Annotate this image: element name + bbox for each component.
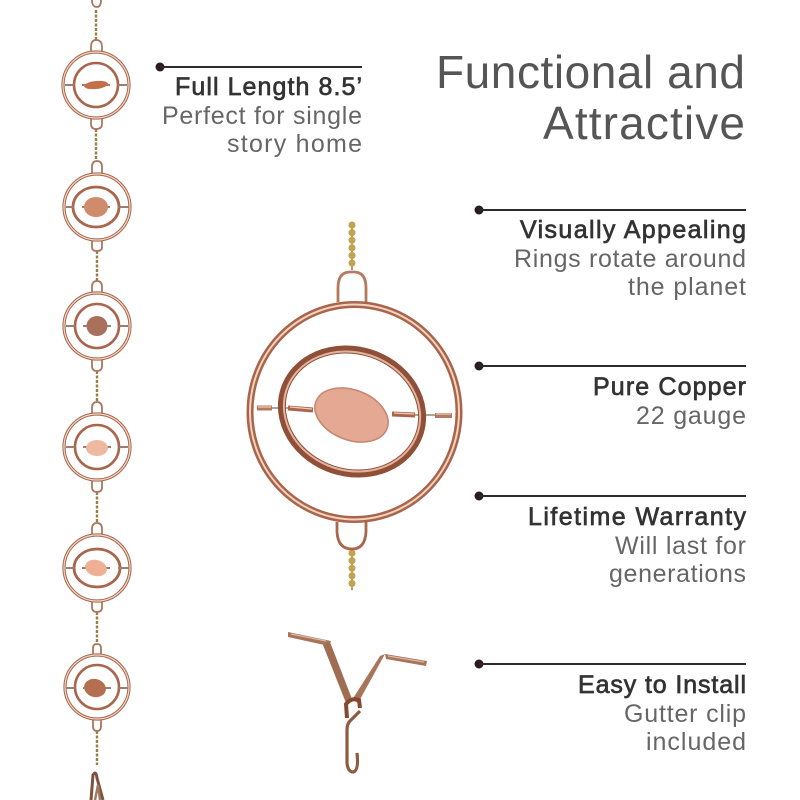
planet	[307, 378, 396, 452]
callout: lifetime warranty: Will last for	[615, 532, 746, 560]
callout: visually appealing: Visually Appealing	[520, 216, 746, 244]
ornament 1	[63, 40, 129, 129]
callout: pure copper	[474, 362, 746, 430]
product: large copper ornament	[250, 222, 459, 590]
callout: easy to install: Gutter clip	[624, 700, 746, 728]
product: gutter clip	[288, 632, 427, 772]
brass chain bottom	[351, 548, 353, 590]
outer ring	[250, 304, 459, 520]
callout: lifetime warranty	[474, 492, 746, 588]
axle	[257, 407, 452, 416]
gutter clip at chain end	[91, 773, 103, 800]
callout: visually appealing: the planet	[628, 273, 746, 301]
callout: full length: Full Length 8.5’	[175, 73, 362, 101]
chain segments	[92, 0, 101, 765]
callout: visually appealing	[474, 206, 746, 301]
ornament 4	[64, 402, 130, 492]
ornament 5	[64, 523, 130, 612]
callout: easy to install: included	[646, 728, 746, 756]
brass chain top	[351, 222, 353, 270]
bottom loop	[337, 522, 366, 549]
callout: full length	[156, 62, 362, 158]
callout: visually appealing: Rings rotate around	[514, 245, 746, 273]
callout: full length: Perfect for single	[162, 102, 362, 130]
title: Attractive	[543, 97, 745, 149]
callout: lifetime warranty: Lifetime Warranty	[528, 503, 746, 531]
callout: easy to install	[474, 660, 746, 756]
product strip: rain chain	[63, 0, 130, 800]
callout: pure copper: Pure Copper	[593, 373, 746, 401]
ornament 2	[64, 161, 130, 251]
top loop	[338, 272, 366, 302]
callout: easy to install: Easy to Install	[578, 671, 746, 699]
callout: lifetime warranty: generations	[609, 560, 746, 588]
title	[436, 46, 745, 149]
callout: pure copper: 22 gauge	[636, 402, 746, 430]
ornament 3	[64, 281, 130, 371]
ornament 6	[65, 644, 129, 731]
title: Functional and	[436, 46, 745, 98]
inner ring	[266, 332, 438, 491]
callout: full length: story home	[227, 130, 362, 158]
